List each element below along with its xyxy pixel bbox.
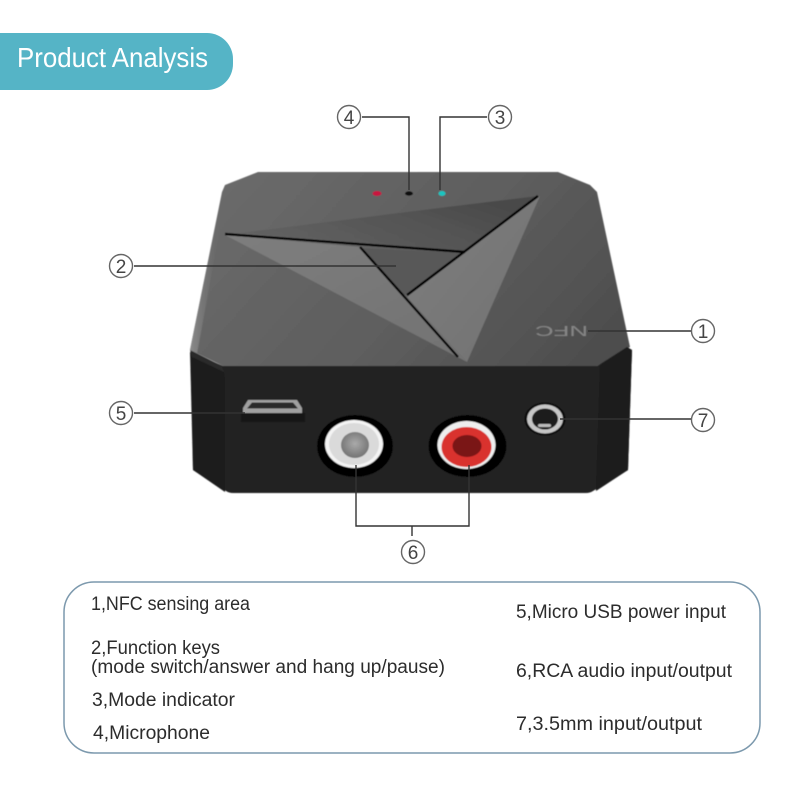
device: Bluetooth receiver <box>190 172 632 493</box>
device left bevel <box>190 192 226 354</box>
callout 6: RCA bracket: 6 <box>408 543 418 564</box>
callout 2: function keys <box>110 254 396 278</box>
RCA jack red <box>428 415 506 477</box>
left light triangle <box>225 235 467 362</box>
LED red <box>372 191 382 196</box>
device front face <box>190 347 632 493</box>
callout 1: NFC sensing area <box>588 320 714 343</box>
device top face <box>190 172 630 366</box>
button shadow area <box>240 196 538 251</box>
callout 3: mode indicator: 3 <box>495 108 505 129</box>
legend item 1: 1,NFC sensing area <box>91 594 250 615</box>
heading: Product Analysis <box>0 33 233 90</box>
device front left chamfer highlight <box>190 350 224 372</box>
center function key <box>360 248 462 295</box>
legend item 4: 4,Microphone <box>93 723 210 744</box>
legend item 3: 3,Mode indicator <box>92 690 236 711</box>
callout 6: RCA bracket <box>356 465 469 564</box>
legend item 2: 2,Function keys <box>91 638 220 659</box>
micro USB port <box>241 400 305 422</box>
legend item 7: 7,3.5mm input/output <box>516 714 703 735</box>
legend item 6: 6,RCA audio input/output <box>516 661 733 682</box>
callout 3: mode indicator <box>440 106 512 190</box>
button grooves <box>225 196 538 357</box>
callout 7: 3.5mm jack <box>560 408 714 432</box>
legend item 2: (mode switch/answer and hang up/pause) <box>91 657 445 678</box>
RCA jack white <box>317 415 393 477</box>
callout 2: function keys: 2 <box>116 257 126 278</box>
right light triangle <box>407 196 540 362</box>
microphone hole <box>405 191 413 196</box>
3.5mm jack <box>524 402 566 436</box>
LED teal <box>438 191 446 196</box>
callout 5: micro USB <box>110 402 245 425</box>
legend item 5: 5,Micro USB power input <box>516 602 727 623</box>
callout 4: microphone <box>338 106 409 190</box>
NFC mark: NFC <box>535 322 588 339</box>
legend panel <box>64 582 760 753</box>
callout 5: micro USB: 5 <box>116 404 126 425</box>
heading: Product Analysis: Product Analysis <box>17 42 208 73</box>
device front right chamfer <box>596 347 632 491</box>
legend item 2 <box>91 638 445 678</box>
callout 7: 3.5mm jack: 7 <box>698 411 708 432</box>
callout 1: NFC sensing area: 1 <box>698 322 708 343</box>
callout 4: microphone: 4 <box>344 108 355 129</box>
device front left chamfer <box>191 352 225 492</box>
